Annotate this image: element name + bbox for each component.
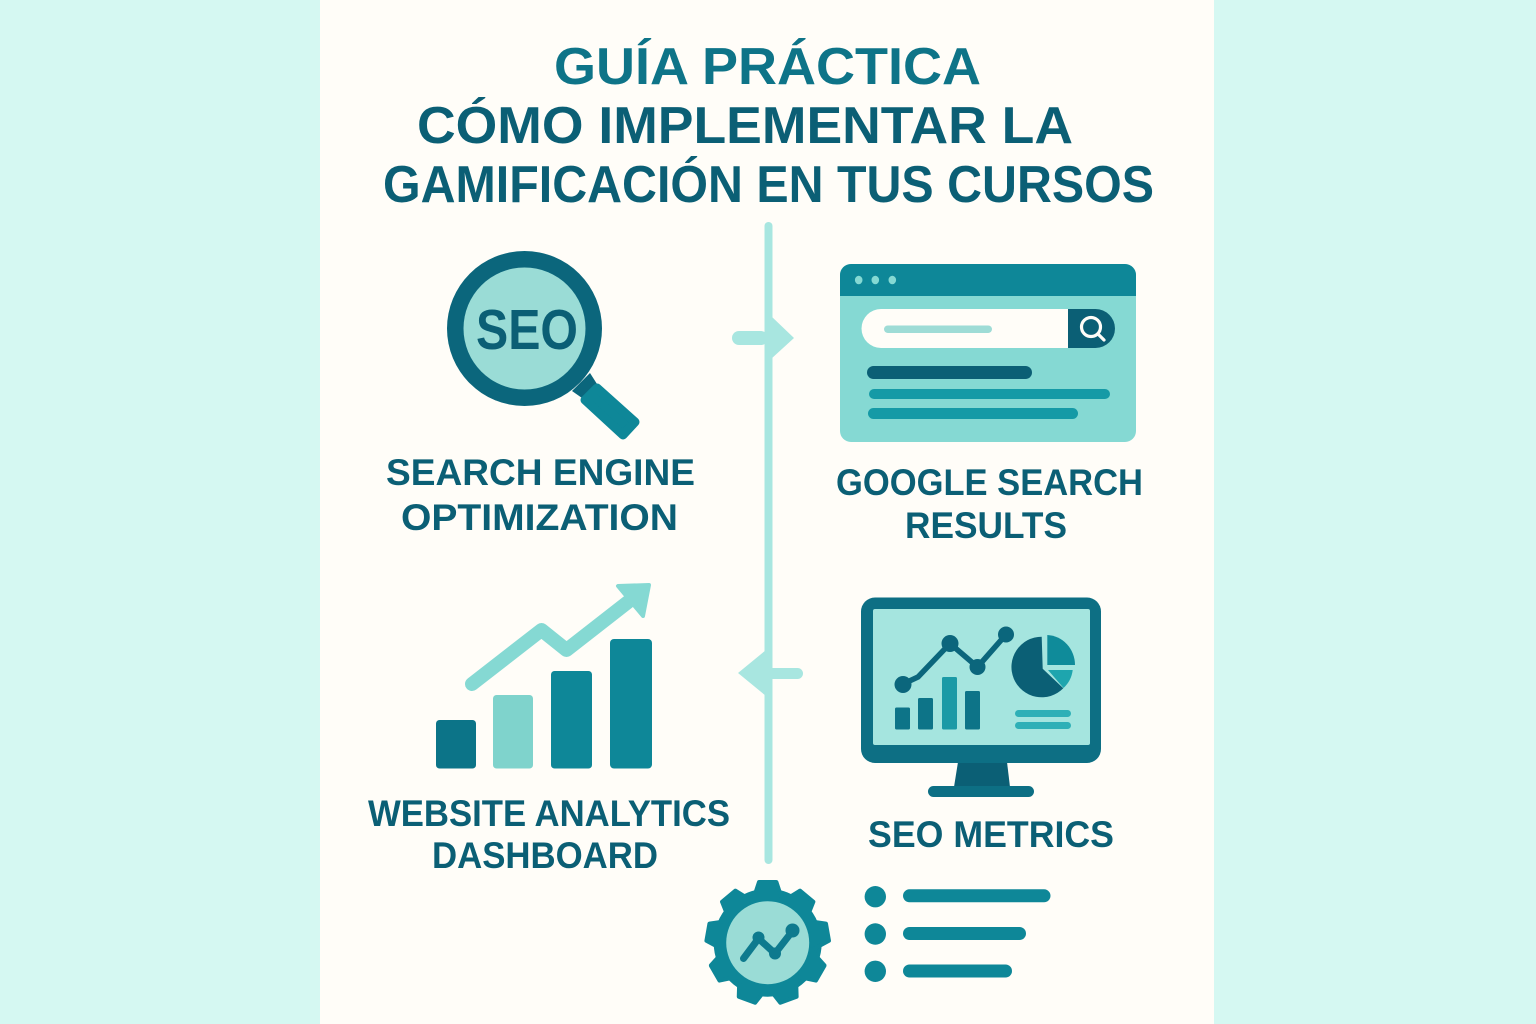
icon: checklist bullets and lines: [865, 886, 1050, 982]
line chart: [894, 626, 1014, 693]
title: CÓMO IMPLEMENTAR LA: [417, 97, 1073, 155]
label: website analytics dashboard: WEBSITE ANALYTICS: [368, 793, 730, 834]
icon: monitor with SEO metrics: [861, 598, 1101, 797]
title: [383, 38, 1154, 214]
label: search engine optimization: SEARCH ENGINE: [386, 452, 695, 493]
small bars: [895, 677, 980, 730]
title: GAMIFICACIÓN EN TUS CURSOS: [383, 156, 1154, 214]
icon: browser search window: [840, 264, 1136, 442]
label: google search results: [836, 462, 1143, 546]
label: seo metrics: SEO METRICS: [868, 814, 1114, 855]
arrow: pointing right: [732, 316, 794, 359]
icon: SEO magnifying glass: SEO: [476, 298, 578, 362]
pie chart: [1011, 635, 1075, 697]
label: google search results: RESULTS: [905, 505, 1067, 546]
label: website analytics dashboard: DASHBOARD: [432, 835, 658, 876]
central timeline with arrows: [732, 222, 803, 864]
label: search engine optimization: OPTIMIZATION: [401, 497, 678, 538]
label: search engine optimization: [386, 452, 695, 538]
arrow: pointing left: [738, 650, 803, 696]
label: google search results: GOOGLE SEARCH: [836, 462, 1143, 503]
icon: SEO magnifying glass: [447, 251, 635, 435]
icon: growth bar chart with arrow: [436, 585, 652, 768]
label: website analytics dashboard: [368, 793, 730, 876]
title: GUÍA PRÁCTICA: [554, 38, 981, 96]
icon: gear with trend line: [705, 882, 830, 1005]
